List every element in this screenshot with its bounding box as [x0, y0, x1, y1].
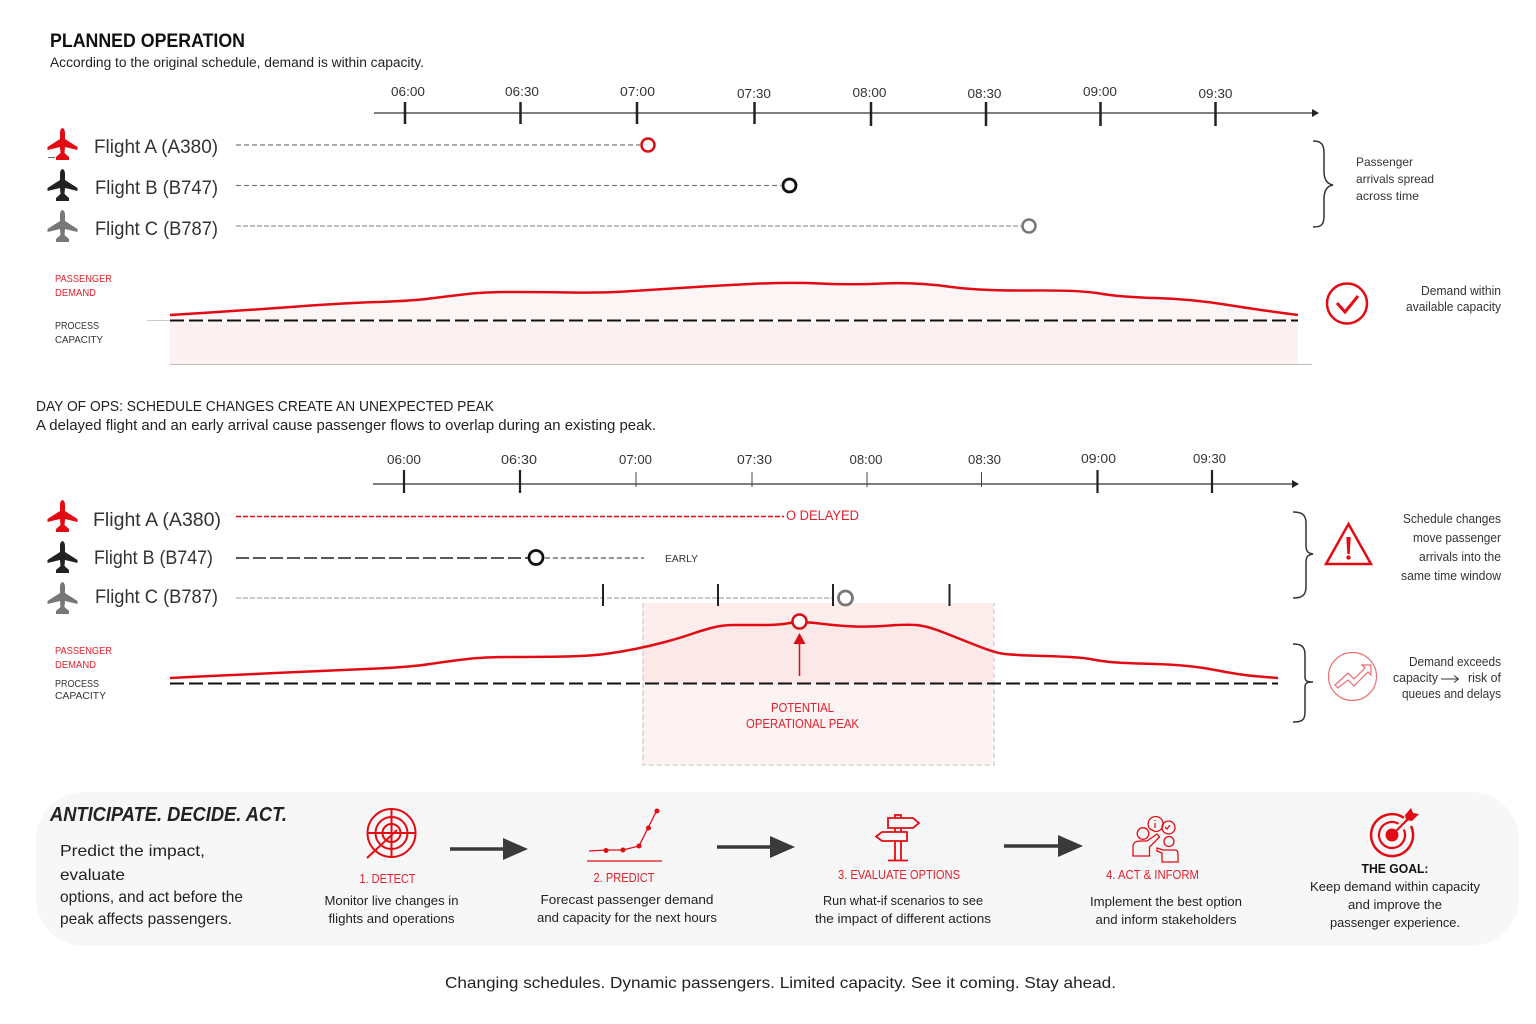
note: passenger arrivals: arrivals spread	[1356, 172, 1434, 186]
step: predict	[537, 871, 717, 925]
arrow	[717, 836, 795, 858]
timeline: day of ops	[373, 451, 1299, 493]
note: passenger arrivals: Passenger	[1356, 155, 1413, 169]
flight row: flight C planned	[48, 210, 1036, 242]
step: predict: Forecast passenger demand	[540, 893, 714, 907]
note: schedule changes: move passenger	[1413, 531, 1501, 545]
step: detect: 1. DETECT	[360, 872, 416, 886]
labels: day of ops chart: PROCESS	[55, 679, 99, 690]
labels: planned chart: DEMAND	[55, 288, 96, 299]
step: evaluate: the impact of different actions	[815, 912, 991, 926]
timeline: planned: 07:00	[620, 84, 655, 99]
icon: goal target	[1371, 808, 1419, 856]
labels: day of ops chart: PASSENGER	[55, 646, 112, 657]
flight row: flight B planned	[48, 169, 796, 201]
note: demand within capacity: available capacity	[1406, 300, 1502, 314]
timeline: day of ops: 07:30	[737, 452, 772, 467]
text: panel summary: peak affects passengers.	[60, 911, 232, 928]
flight row: flight C	[48, 582, 833, 614]
highlight: peak window	[642, 603, 994, 765]
icon: signpost	[876, 815, 919, 860]
icon: people informing	[1133, 817, 1178, 862]
title: planned operation	[50, 31, 424, 70]
timeline: planned: 06:30	[505, 84, 539, 99]
step: evaluate: 3. EVALUATE OPTIONS	[838, 868, 960, 882]
timeline: day of ops: 09:30	[1193, 451, 1226, 466]
note: schedule changes: Schedule changes	[1403, 512, 1501, 526]
note: schedule changes: arrivals into the	[1419, 550, 1501, 564]
flight row: flight B early: Flight B (B747)	[94, 548, 213, 569]
step: act and inform: 4. ACT & INFORM	[1106, 868, 1199, 882]
step: evaluate	[815, 868, 991, 926]
text: panel summary	[60, 843, 243, 928]
step: act and inform	[1090, 868, 1242, 927]
icon: warning triangle	[1326, 524, 1371, 564]
goal text: THE GOAL:	[1362, 861, 1428, 876]
heading: anticipate: ANTICIPATE. DECIDE. ACT.	[49, 804, 287, 826]
step: predict: and capacity for the next hours	[537, 911, 717, 925]
labels: planned chart	[55, 274, 112, 346]
timeline: planned: 09:30	[1198, 86, 1232, 101]
arrow	[1004, 835, 1083, 857]
labels: planned chart: PASSENGER	[55, 274, 112, 285]
icon: check circle	[1327, 284, 1367, 324]
text: panel summary: evaluate	[60, 867, 125, 884]
goal text: Keep demand within capacity	[1310, 880, 1481, 894]
ticks: flight C shifted	[603, 584, 950, 606]
label: potential operational peak: POTENTIAL	[771, 701, 834, 715]
note: demand exceeds capacity: risk of	[1468, 671, 1502, 685]
goal text	[1310, 861, 1481, 930]
label: potential operational peak: OPERATIONAL PEAK	[746, 717, 860, 731]
panel: anticipate decide act	[36, 792, 1519, 946]
note: demand within capacity: Demand within	[1421, 284, 1501, 298]
title: planned operation: PLANNED OPERATION	[50, 31, 245, 52]
labels: planned chart: CAPACITY	[55, 335, 103, 346]
timeline: day of ops: 08:30	[968, 452, 1001, 467]
brace: planned arrivals	[1313, 141, 1333, 227]
heading: day of ops: A delayed flight and an early arrival cause passenger flows to overlap during an existing peak.	[36, 418, 656, 434]
note: demand exceeds capacity	[1393, 655, 1502, 701]
step: predict: 2. PREDICT	[594, 871, 655, 885]
timeline: day of ops: 09:00	[1081, 451, 1116, 466]
note: passenger arrivals: across time	[1356, 189, 1419, 203]
title: planned operation: According to the original schedule, demand is within capacity.	[50, 55, 424, 70]
icon: radar	[367, 809, 416, 858]
arrow	[450, 838, 528, 860]
note: demand exceeds capacity: capacity	[1393, 671, 1439, 685]
step: detect: flights and operations	[328, 912, 454, 926]
note: passenger arrivals	[1356, 155, 1434, 203]
step: detect: Monitor live changes in	[324, 894, 459, 908]
note: demand exceeds capacity: queues and delays	[1402, 687, 1501, 701]
text: panel summary: options, and act before the	[60, 889, 243, 906]
note: schedule changes	[1401, 512, 1502, 583]
timeline: planned: 09:00	[1083, 84, 1117, 99]
note: demand within capacity	[1406, 284, 1502, 314]
flight row: flight A delayed: Flight A (A380)	[93, 510, 221, 531]
timeline: planned	[374, 84, 1319, 126]
chart: planned demand vs capacity	[147, 283, 1312, 364]
goal text: passenger experience.	[1330, 916, 1460, 930]
labels: day of ops chart: DEMAND	[55, 660, 96, 671]
flight row: flight B early: EARLY	[665, 553, 698, 565]
note: demand exceeds capacity: Demand exceeds	[1409, 655, 1501, 669]
timeline: day of ops: 06:30	[501, 452, 537, 467]
flight row: flight C planned: Flight C (B787)	[95, 219, 218, 240]
tagline: Changing schedules. Dynamic passengers. Limited capacity. See it coming. Stay ahead.	[445, 975, 1116, 992]
timeline: planned: 06:00	[391, 84, 425, 99]
step: detect	[324, 872, 459, 926]
flight row: flight A delayed	[48, 500, 859, 532]
label: potential operational peak	[746, 701, 860, 731]
heading: day of ops: DAY OF OPS: SCHEDULE CHANGES CREATE AN UNEXPECTED PEAK	[36, 399, 494, 415]
timeline: planned: 07:30	[737, 86, 771, 101]
flight row: flight B early	[48, 541, 698, 573]
goal text: and improve the	[1348, 898, 1442, 912]
note: schedule changes: same time window	[1401, 569, 1502, 583]
flight row: flight A delayed: O DELAYED	[786, 508, 859, 523]
step: act and inform: Implement the best option	[1090, 895, 1242, 909]
flight row: flight B planned: Flight B (B747)	[95, 178, 218, 199]
brace: demand exceeds	[1293, 644, 1313, 722]
icon: rising chart	[587, 808, 662, 861]
icon: rising trend circle	[1328, 652, 1376, 700]
flight row: flight C: Flight C (B787)	[95, 587, 218, 608]
marker: peak point and arrow	[792, 614, 806, 676]
timeline: planned: 08:00	[852, 85, 886, 100]
chart: day of ops demand vs capacity	[170, 622, 1278, 684]
flight row: flight A planned	[48, 128, 654, 160]
brace: schedule changes	[1293, 512, 1313, 598]
labels: day of ops chart: CAPACITY	[55, 691, 106, 702]
step: act and inform: and inform stakeholders	[1096, 913, 1236, 927]
step: evaluate: Run what-if scenarios to see	[823, 894, 983, 908]
labels: day of ops chart	[55, 646, 112, 702]
flight row: flight A planned: Flight A (A380)	[94, 137, 218, 158]
labels: planned chart: PROCESS	[55, 321, 99, 332]
heading: day of ops	[36, 399, 656, 434]
timeline: planned: 08:30	[968, 86, 1002, 101]
timeline: day of ops: 06:00	[387, 452, 421, 467]
text: panel summary: Predict the impact,	[60, 843, 205, 860]
timeline: day of ops: 07:00	[619, 452, 652, 467]
timeline: day of ops: 08:00	[850, 452, 882, 467]
